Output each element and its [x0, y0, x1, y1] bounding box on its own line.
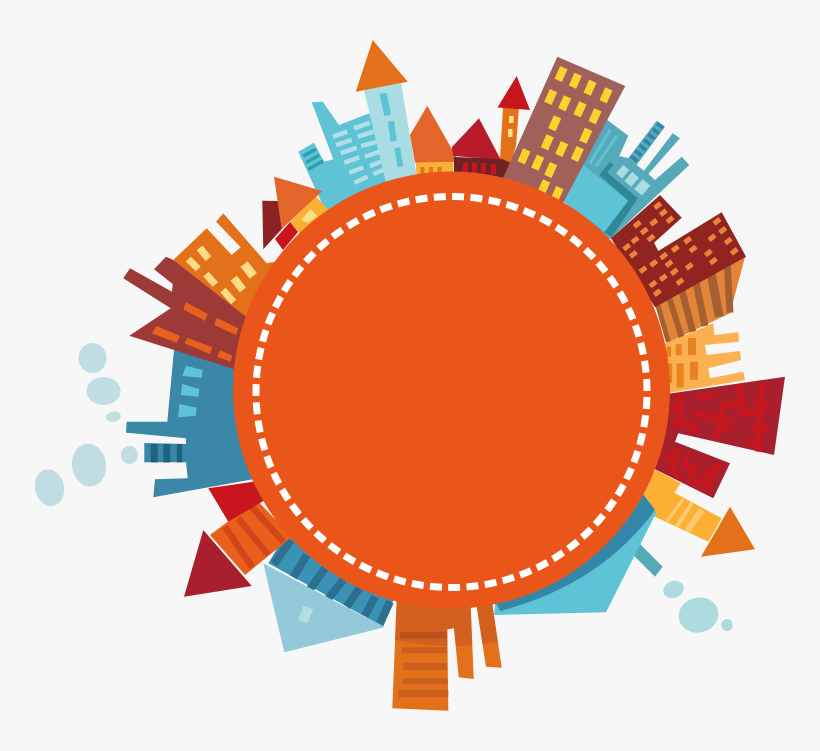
building: orange block with pale windows — [173, 213, 285, 325]
building: dark red block with orange windows — [611, 195, 746, 307]
building: orange striped block — [655, 256, 745, 343]
building: cyan wedge with blue band — [490, 490, 657, 615]
building: yellow house with orange roof — [410, 106, 459, 178]
central orange circle — [233, 172, 670, 608]
building: cyan office block with windows — [298, 102, 390, 212]
building: red block — [208, 482, 265, 522]
white dashed ring — [256, 196, 647, 588]
building: brick red block with orange windows — [123, 257, 250, 371]
building: small orange tower with red roof — [498, 76, 530, 163]
decorative clouds: left — [31, 343, 138, 509]
building: red brick block — [650, 377, 785, 498]
building: teal factory with chimneys — [563, 120, 689, 239]
building: brown tower with yellow windows — [503, 57, 625, 203]
building: dark house with red roof — [452, 118, 511, 180]
building: blue striped base with light blue triangle — [263, 530, 395, 652]
arrow: yellow striped building with orange tip — [636, 470, 755, 557]
teal stick — [633, 544, 663, 577]
building: peach block with orange windows — [660, 323, 745, 393]
decorative clouds: right — [661, 578, 733, 637]
building: orange lower tower — [392, 602, 502, 711]
building: blue block with cyan windows — [126, 350, 260, 497]
arrow: orange striped building with dark red tip — [184, 500, 292, 597]
building: small tower with orange roof — [262, 177, 330, 250]
building: pale blue tower with orange roof — [356, 40, 417, 182]
